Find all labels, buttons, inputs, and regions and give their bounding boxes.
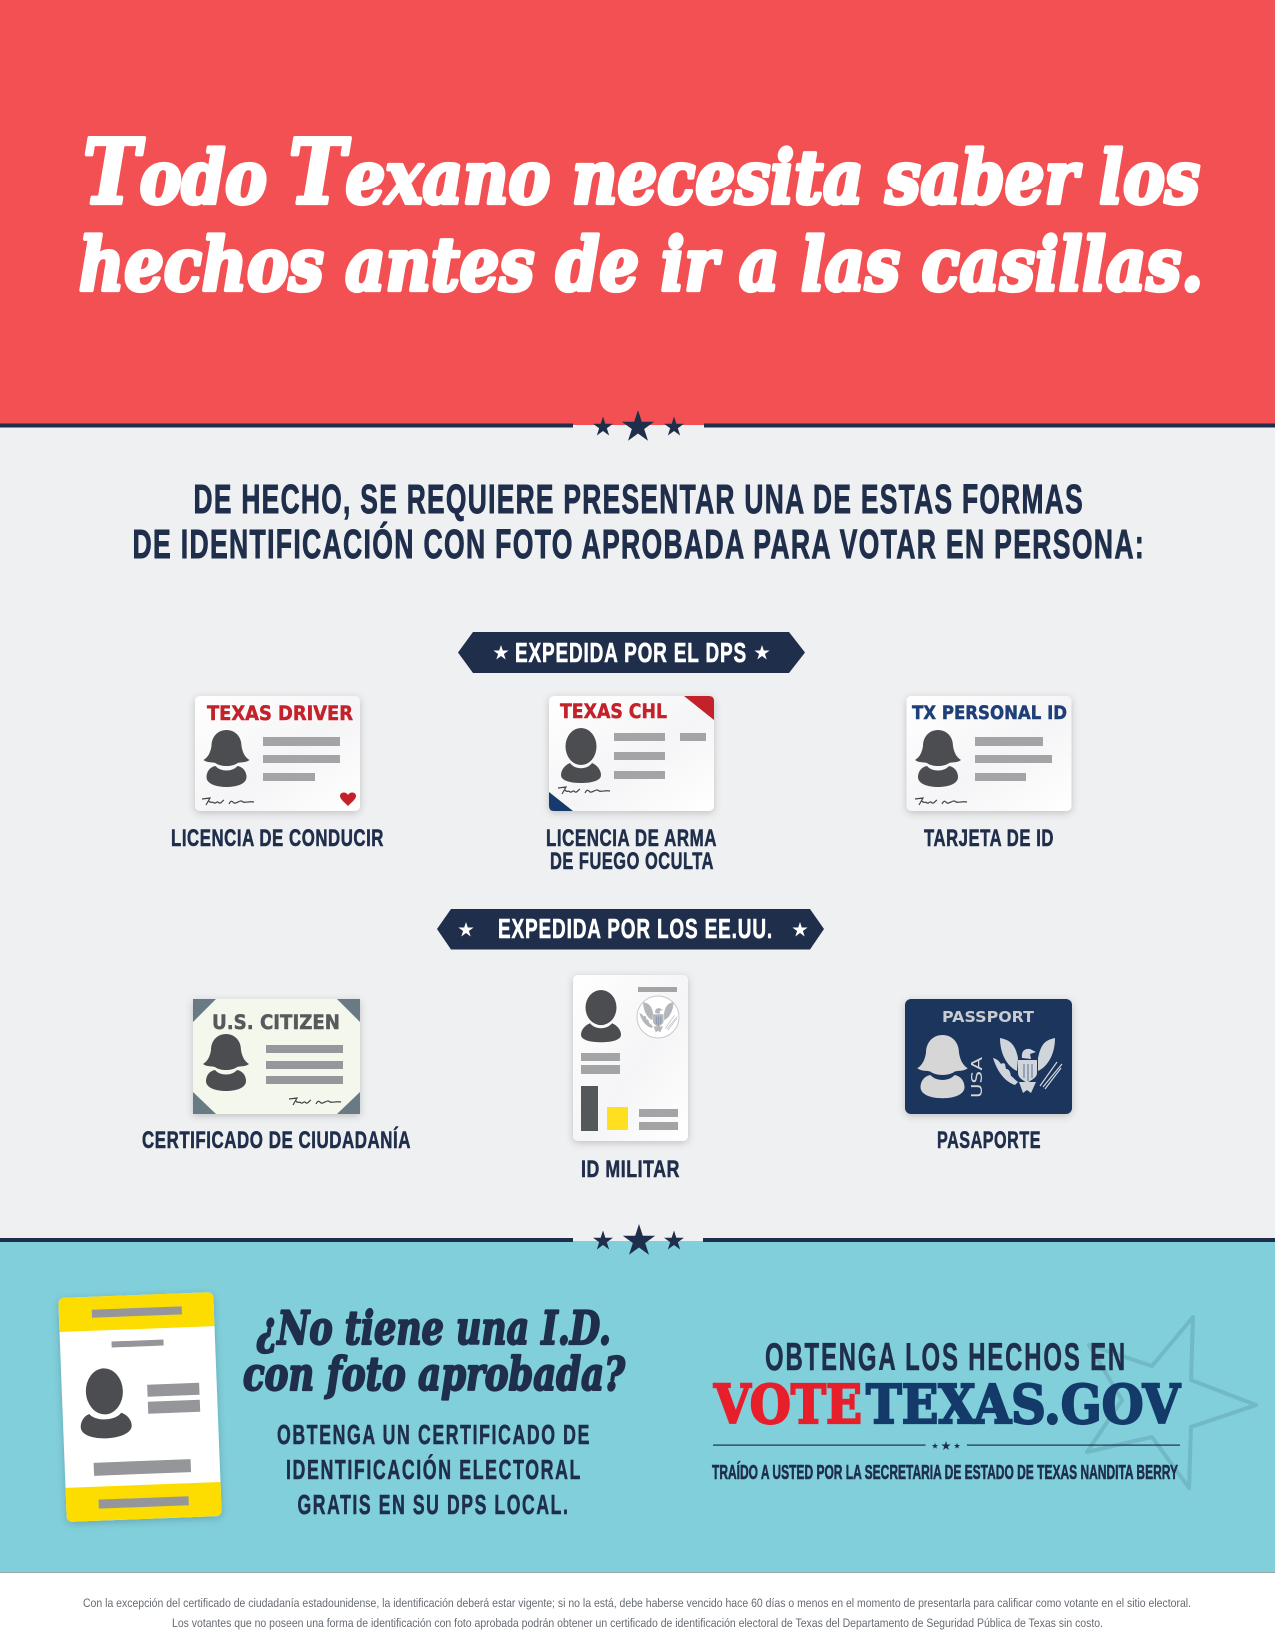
panel: footer fine print bbox=[0, 1573, 1275, 1651]
heading: no tiene una ID: ¿No tiene una I.D. bbox=[256, 1301, 611, 1355]
label: licencia de arma: LICENCIA DE ARMA bbox=[546, 825, 717, 852]
text: obtenga un certificado: IDENTIFICACIÓN ELECTORAL bbox=[286, 1454, 582, 1485]
panel: teal footer band bbox=[0, 1238, 1275, 1573]
logo: votetexas.gov: VOTE bbox=[713, 1374, 862, 1436]
heading bbox=[132, 476, 1145, 567]
text: obtenga un certificado: GRATIS EN SU DPS LOCAL. bbox=[298, 1489, 570, 1520]
banner: EE.UU.: EXPEDIDA POR LOS EE.UU. bbox=[498, 913, 773, 944]
label: licencia de arma bbox=[546, 825, 717, 875]
banner: EE.UU. bbox=[437, 909, 824, 950]
card: TX personal ID: TX PERSONAL ID bbox=[912, 702, 1067, 724]
logo: votetexas.gov: TEXAS.GOV bbox=[866, 1374, 1181, 1436]
card: military ID bbox=[573, 975, 688, 1141]
icon: voter ID card bbox=[58, 1292, 222, 1522]
icon: three stars top bbox=[593, 410, 684, 441]
panel: footer fine print: Los votantes que no poseen una forma de identificación con foto aprobada podrán obtener un certificado de identificación electoral de Texas del Departamento de Seguridad Pública de Texas sin costo. bbox=[172, 1616, 1103, 1630]
card: Texas driver: TEXAS DRIVER bbox=[207, 702, 353, 725]
heading: no tiene una ID bbox=[243, 1301, 626, 1401]
card: Texas CHL bbox=[549, 696, 714, 811]
banner: DPS: EXPEDIDA POR EL DPS bbox=[515, 637, 747, 668]
icon: three stars bottom bbox=[593, 1224, 684, 1255]
label: licencia de arma: DE FUEGO OCULTA bbox=[550, 848, 714, 875]
banner: DPS bbox=[458, 632, 805, 673]
heading: no tiene una ID: con foto aprobada? bbox=[243, 1347, 626, 1401]
card: Texas driver bbox=[195, 696, 360, 811]
text: obtenga un certificado: OBTENGA UN CERTIFICADO DE bbox=[277, 1419, 591, 1450]
label: tarjeta de ID: TARJETA DE ID bbox=[924, 825, 1054, 852]
label: pasaporte: PASAPORTE bbox=[937, 1127, 1041, 1154]
panel: red header bbox=[0, 0, 1275, 428]
card: passport: PASSPORT bbox=[942, 1008, 1034, 1026]
divider with stars bbox=[713, 1441, 1180, 1450]
title bbox=[79, 119, 1203, 308]
icon: star outline bbox=[1087, 1317, 1256, 1488]
card: TX personal ID bbox=[906, 696, 1072, 811]
label: licencia de conducir: LICENCIA DE CONDUCIR bbox=[171, 825, 384, 852]
text: obtenga un certificado bbox=[277, 1419, 591, 1520]
card: U.S. citizen: U.S. CITIZEN bbox=[212, 1011, 340, 1034]
card: passport: USA bbox=[968, 1056, 986, 1098]
logo: votetexas.gov bbox=[713, 1374, 1181, 1436]
card: U.S. citizen bbox=[193, 999, 360, 1114]
card: Texas CHL: TEXAS CHL bbox=[560, 700, 667, 723]
label: certificado de ciudadania: CERTIFICADO DE CIUDADANÍA bbox=[142, 1126, 411, 1154]
label: ID militar: ID MILITAR bbox=[581, 1156, 680, 1183]
card: passport bbox=[905, 999, 1072, 1114]
